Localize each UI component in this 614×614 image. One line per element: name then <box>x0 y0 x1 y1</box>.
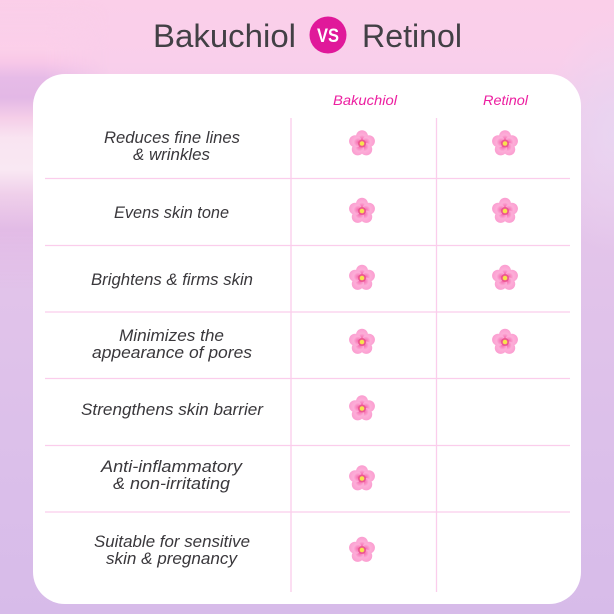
row 1 label: Reduces fine lines <box>104 129 240 147</box>
icons: Retinol flowers <box>490 130 520 356</box>
row 7 label: skin & pregnancy <box>106 550 239 568</box>
row 3 label: Brightens & firms skin <box>91 271 253 289</box>
row 7 label <box>94 533 250 568</box>
row 1 label <box>104 129 240 164</box>
badge: VS: VS <box>317 26 339 47</box>
row 6 label: Anti-inflammatory <box>100 458 244 476</box>
column header: Retinol: Retinol <box>483 93 529 108</box>
row 4 label: appearance of pores <box>92 344 252 362</box>
row 6 label: & non-irritating <box>113 475 231 493</box>
row 4 label: Minimizes the <box>119 327 224 345</box>
column header: Bakuchiol: Bakuchiol <box>333 93 398 108</box>
row 2 label: Evens skin tone <box>114 204 229 222</box>
title <box>153 16 462 54</box>
row 1 label: & wrinkles <box>133 146 210 164</box>
background left glow <box>0 64 77 240</box>
heading: Retinol: Retinol <box>362 18 462 54</box>
icons: Bakuchiol flowers <box>347 130 377 564</box>
row 4 label <box>92 327 252 362</box>
heading: Bakuchiol: Bakuchiol <box>153 18 296 54</box>
panel: comparison card <box>33 74 581 604</box>
row 7 label: Suitable for sensitive <box>94 533 250 551</box>
row 5 label: Strengthens skin barrier <box>81 401 265 419</box>
badge: VS <box>310 16 346 54</box>
row 6 label <box>100 458 244 493</box>
